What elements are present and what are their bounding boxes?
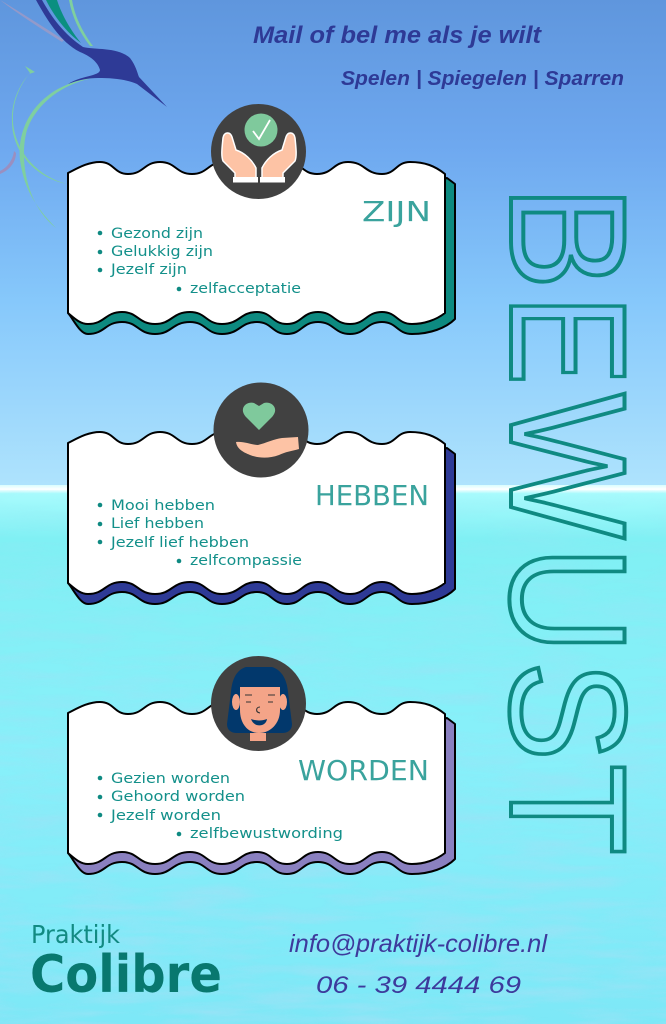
list: zijn: zelfacceptatie (190, 281, 301, 297)
list: worden: Jezelf worden (110, 808, 221, 824)
card body (68, 702, 445, 864)
list: worden: Gezien worden (111, 771, 230, 787)
icon: hand with heart (214, 382, 308, 478)
list: worden: zelfbewustwording (190, 826, 343, 842)
card body (68, 162, 445, 324)
contact phone: 06 - 39 4444 69 (316, 972, 521, 999)
list: zijn (98, 226, 301, 297)
card body (68, 432, 445, 594)
panel: hebben (68, 382, 455, 604)
list: hebben (98, 498, 302, 569)
vertical title: U (476, 546, 660, 654)
list: hebben: Mooi hebben (111, 498, 215, 514)
heading: zijn: ZIJN (362, 195, 431, 228)
list: hebben: zelfcompassie (190, 553, 302, 569)
vertical title: T (476, 764, 660, 855)
vertical title: E (476, 295, 660, 385)
card shadow (68, 718, 455, 874)
logo text: colibre: Colibre (30, 945, 222, 1005)
contact email: info@praktijk-colibre.nl (289, 930, 548, 958)
logo text: praktijk: Praktijk (31, 920, 120, 949)
background: sky (0, 0, 666, 485)
icon: hands with check (211, 104, 306, 199)
panel: worden (68, 656, 455, 874)
list: zijn: Jezelf zijn (110, 262, 187, 278)
icon: hummingbird logo (0, 0, 167, 228)
vertical title: S (476, 661, 660, 761)
heading: hebben: HEBBEN (315, 479, 429, 512)
subheading: three S: Spelen | Spiegelen | Sparren (341, 68, 624, 90)
list: hebben: Lief hebben (111, 516, 204, 532)
vertical title: B (476, 185, 660, 290)
card shadow (68, 448, 455, 604)
list: worden (98, 771, 343, 842)
list: zijn: Gelukkig zijn (111, 244, 213, 260)
heading: worden: WORDEN (298, 754, 429, 787)
background: sea (0, 485, 666, 1024)
vertical title: W (476, 393, 660, 539)
panel: zijn (68, 104, 455, 334)
list: zijn: Gezond zijn (111, 226, 203, 242)
card shadow (68, 178, 455, 334)
list: worden: Gehoord worden (111, 789, 245, 805)
list: hebben: Jezelf lief hebben (110, 535, 249, 551)
vertical title (476, 185, 660, 855)
heading: contact invitation: Mail of bel me als je wilt (253, 22, 542, 49)
icon: smiling face (211, 656, 306, 751)
